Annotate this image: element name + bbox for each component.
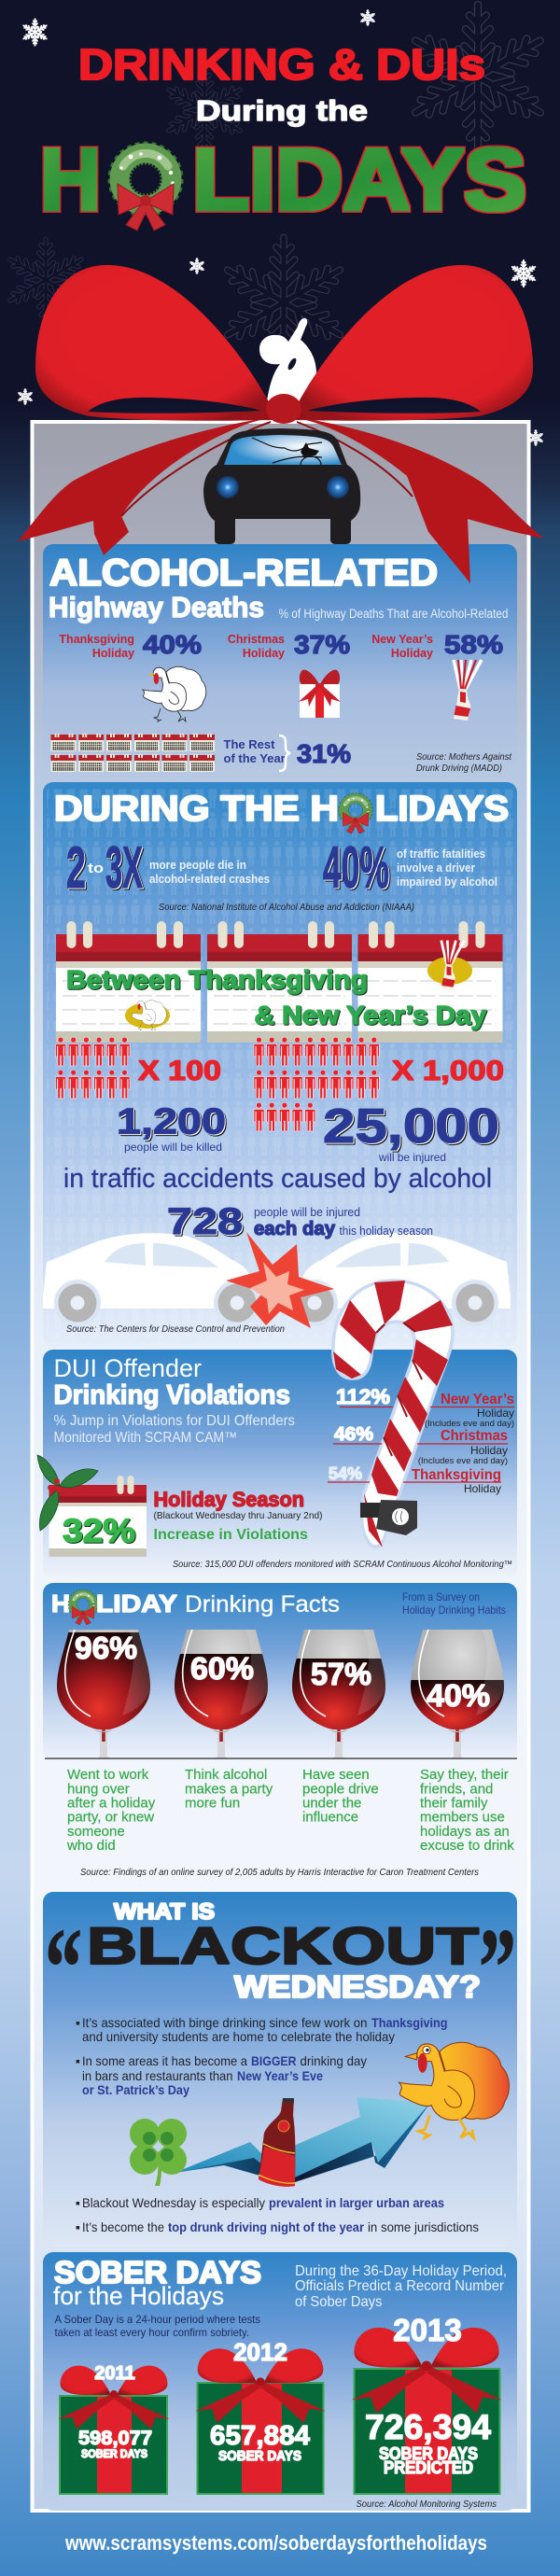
caption: say they: Say they, their xyxy=(420,1767,509,1783)
gift: 2013 xyxy=(351,2313,502,2494)
heading: for the holidays: for the Holidays xyxy=(53,2282,224,2310)
definition: sober day: A Sober Day is a 24-hour period where tests xyxy=(54,2313,260,2326)
caption: say they: members use xyxy=(420,1810,505,1826)
icon: beer bottle xyxy=(259,2098,295,2187)
label: thanksgiving holiday: Holiday xyxy=(92,647,134,660)
caption: say they: holidays as an xyxy=(420,1824,510,1840)
bullet: bigger drinking day: in bars and restaurants than xyxy=(82,2068,233,2083)
stat: thanksgiving 54 percent xyxy=(328,1464,501,1495)
title xyxy=(40,40,526,231)
caption: went to work: who did xyxy=(66,1838,116,1854)
stat: christmas 46 percent: Christmas xyxy=(441,1428,508,1444)
bow tail: right xyxy=(297,417,544,583)
car: left xyxy=(43,1233,254,1309)
bow loop: left xyxy=(35,265,273,421)
wine glass: 60 percent xyxy=(175,1630,268,1758)
heading: between thanksgiving: Between Thanksgiving xyxy=(66,965,368,994)
headlights xyxy=(217,476,349,498)
heading: blackout: BLACKOUT xyxy=(87,1916,479,1975)
crash explosion xyxy=(226,1232,334,1328)
source: MADD: Source: Mothers Against xyxy=(416,752,512,763)
heading: holiday season: Holiday Season xyxy=(153,1488,304,1511)
label: new year's holiday: New Year’s xyxy=(371,633,433,646)
stat: 728: 728 xyxy=(167,1201,243,1242)
subtitle: jump in violations: % Jump in Violations for DUI Offenders xyxy=(54,1413,295,1429)
panel: DUI offender drinking violations xyxy=(37,1350,517,1578)
bullet: bigger drinking day: In some areas it has become a xyxy=(82,2053,247,2068)
label: christmas holiday: Christmas xyxy=(228,633,285,646)
multiplier: x 100: X 100 xyxy=(138,1056,221,1086)
calendars xyxy=(56,921,502,1043)
bullet: top drunk driving: ▪ xyxy=(76,2219,80,2234)
source: MADD: Drunk Driving (MADD) xyxy=(416,763,502,774)
text: blackout wednesday thru january 2nd: (Blackout Wednesday thru January 2nd) xyxy=(153,1510,323,1521)
bullet: urban areas: ▪ xyxy=(76,2195,80,2210)
note: from a survey: Holiday Drinking Habits xyxy=(402,1603,506,1617)
stat: 25,000: 25,000 xyxy=(323,1099,499,1154)
caption: have seen: Have seen xyxy=(302,1767,370,1783)
stat: 58 percent: 58% xyxy=(444,630,503,659)
gift: 2012: 2012 xyxy=(233,2338,287,2366)
stat: 2 to 3x xyxy=(66,835,143,901)
heading: new year's day: & New Year’s Day xyxy=(254,1001,486,1029)
gift: 2011: 598,077 xyxy=(78,2428,152,2449)
rising arrow xyxy=(175,2097,430,2184)
bow knot xyxy=(266,394,301,424)
bullet: binge drinking: It’s associated with binge drinking since few work on xyxy=(82,2015,368,2030)
stat: thanksgiving 54 percent: Thanksgiving xyxy=(412,1467,501,1483)
note: from a survey: From a Survey on xyxy=(402,1590,480,1603)
panel: holiday drinking facts xyxy=(43,1583,517,1878)
text: people will be killed: people will be killed xyxy=(124,1141,222,1154)
windshield xyxy=(224,435,342,465)
brace xyxy=(279,735,290,771)
text: of traffic fatalities: impaired by alcohol xyxy=(397,875,497,889)
caption: think alcohol: makes a party xyxy=(185,1781,273,1797)
drinking figure silhouette xyxy=(259,318,316,407)
text: during the 36-day period: During the 36-Day Holiday Period, xyxy=(295,2263,507,2279)
title word: H: H xyxy=(40,131,101,228)
caption: went to work: hung over xyxy=(67,1781,130,1797)
caption: say they: their family xyxy=(420,1796,488,1812)
bullet: binge drinking: Thanksgiving xyxy=(371,2015,448,2030)
background snowflakes, dark outline xyxy=(7,5,547,368)
source: alcohol monitoring systems: Source: Alcohol Monitoring Systems xyxy=(357,2499,497,2510)
source: SCRAM: Source: 315,000 DUI offenders monitored with SCRAM Continuous Alcohol Monitoring™ xyxy=(173,1560,512,1570)
gift: 2013: 726,394 xyxy=(365,2408,491,2446)
stat: 40 percent of fatalities: 40% xyxy=(323,835,389,901)
caption: say they: friends, and xyxy=(420,1781,493,1797)
heading: what is: WHAT IS xyxy=(114,1899,215,1925)
stat: new year's 112 percent: 112% xyxy=(336,1385,390,1408)
bullet: bigger drinking day: or St. Patrick’s Day xyxy=(82,2082,189,2097)
heading: sober days: SOBER DAYS xyxy=(54,2255,261,2289)
stat: thanksgiving 54 percent: 54% xyxy=(329,1464,362,1483)
car: right xyxy=(300,1233,511,1309)
multiplier: x 1,000: X 1,000 xyxy=(392,1056,504,1086)
stat: christmas 46 percent: Holiday xyxy=(470,1444,508,1457)
text: increase in violations: Increase in Violations xyxy=(153,1527,308,1543)
caption: went to work: party, or knew xyxy=(67,1810,154,1826)
label: thanksgiving holiday: Thanksgiving xyxy=(59,633,134,646)
panel: what is blackout wednesday xyxy=(43,1892,517,2247)
panel: alcohol-related highway deaths xyxy=(43,544,517,777)
icon: orange turkey xyxy=(399,2042,509,2137)
stat: 32 percent: 32% xyxy=(63,1513,135,1549)
heading: alcohol-related: ALCOHOL-RELATED xyxy=(49,553,438,594)
calendars: rest of year xyxy=(50,734,215,772)
icon: four-leaf clover xyxy=(130,2119,187,2186)
label: the rest of the year: The Rest xyxy=(224,737,275,751)
gift: 2012 xyxy=(195,2338,326,2494)
stat: new year's 112 percent xyxy=(336,1385,514,1429)
icon: white turkey xyxy=(143,666,206,721)
heading: drinking facts: Drinking Facts xyxy=(185,1591,340,1617)
text: more people die: more people die in xyxy=(149,859,246,872)
label: the rest of the year: of the Year xyxy=(224,751,286,765)
icon: champagne bottle xyxy=(454,660,482,721)
people icons: killed xyxy=(56,1037,130,1099)
bullet: bigger drinking day: BIGGER xyxy=(251,2053,297,2068)
white frame xyxy=(32,422,528,2511)
caption: went to work: after a holiday xyxy=(67,1796,156,1812)
stat: 2 to 3x: 3X xyxy=(105,835,143,901)
stat: 1,200: 1,200 xyxy=(117,1101,226,1142)
monitoring bracelet xyxy=(360,1500,417,1535)
caption: have seen: people drive xyxy=(302,1781,379,1797)
caption: think alcohol: more fun xyxy=(185,1796,240,1812)
subheading: highway deaths: Highway Deaths xyxy=(49,591,264,623)
panel: during the holidays xyxy=(43,782,517,1347)
wine glass: 96 percent xyxy=(57,1630,150,1758)
caption: think alcohol: Think alcohol xyxy=(185,1767,267,1783)
wine glass: 57 percent: 57% xyxy=(311,1657,371,1691)
caption: say they: excuse to drink xyxy=(420,1838,514,1854)
icon: wreath xyxy=(343,798,369,833)
text: each day: each day xyxy=(254,1219,336,1239)
source: NIAAA: Source: National Institute of Alcohol Abuse and Addiction (NIAAA) xyxy=(159,902,414,913)
stat: new year's 112 percent: (Includes eve and day) xyxy=(425,1419,514,1429)
bullet: binge drinking: and university students are home to celebrate the holiday xyxy=(82,2029,395,2044)
crash cars xyxy=(43,1233,511,1326)
gift: 2012: SOBER DAYS xyxy=(218,2449,301,2464)
definition: sober day: taken at least every hour confirm sobriety. xyxy=(54,2326,249,2339)
heading: during the H: DURING THE H xyxy=(54,790,339,829)
gift: 2013: PREDICTED xyxy=(384,2458,473,2477)
wine glass: 96 percent: 96% xyxy=(75,1631,137,1665)
footer url: www.scramsystems.com/soberdaysfortheholidays xyxy=(64,2531,487,2555)
text: of traffic fatalities: of traffic fatalities xyxy=(397,847,485,861)
stat: 37 percent: 37% xyxy=(294,630,350,659)
stat: christmas 46 percent: 46% xyxy=(334,1424,373,1445)
bullet: top drunk driving: It’s become the xyxy=(82,2219,164,2234)
caption: have seen: under the xyxy=(302,1796,361,1812)
stat: 40 percent: 40% xyxy=(143,630,202,659)
bullet: binge drinking: ▪ xyxy=(76,2015,80,2030)
caption: have seen: influence xyxy=(302,1810,358,1826)
people pattern xyxy=(47,789,513,1339)
bow loop: right xyxy=(295,265,533,421)
red bow xyxy=(18,265,544,583)
stat: christmas 46 percent xyxy=(333,1424,508,1466)
text: more people die: alcohol-related crashes xyxy=(149,873,270,886)
gift: 2011 xyxy=(58,2363,170,2494)
text: in traffic accidents: in traffic accidents caused by alcohol xyxy=(63,1164,492,1194)
heading: DUI offender: DUI Offender xyxy=(54,1354,202,1382)
stat: new year's 112 percent: Holiday xyxy=(477,1407,514,1420)
heading: drinking violations: Drinking Violations xyxy=(54,1380,290,1410)
wine glass: 40 percent: 40% xyxy=(427,1678,490,1713)
bullet: urban areas: Blackout Wednesday is especially xyxy=(82,2195,265,2210)
icon: wreath xyxy=(72,1593,94,1625)
stat: 2 to 3x: to xyxy=(88,861,104,876)
text: of traffic fatalities: involve a driver xyxy=(397,861,475,875)
subtitle: jump in violations: Monitored With SCRAM CAM™ xyxy=(54,1430,237,1446)
label: new year's holiday: Holiday xyxy=(391,647,433,660)
candy cane xyxy=(333,1281,453,1547)
stat: new year's 112 percent: New Year’s xyxy=(441,1392,514,1407)
gift: 2013: 2013 xyxy=(393,2313,462,2347)
stat: thanksgiving 54 percent: Holiday xyxy=(464,1482,501,1495)
gift: 2013: SOBER DAYS xyxy=(379,2444,478,2463)
people icons: injured xyxy=(254,1037,379,1131)
heading: H: H xyxy=(51,1589,70,1617)
gift: 2011: SOBER DAYS xyxy=(81,2449,147,2460)
text: will be injured: will be injured xyxy=(378,1151,446,1164)
icon: bottle on gold xyxy=(427,941,472,990)
text: during the 36-day period: of Sober Days xyxy=(295,2294,383,2310)
bullet: bigger drinking day: ▪ xyxy=(76,2053,80,2068)
violation stats xyxy=(328,1385,514,1495)
title word: LIDAYS: LIDAYS xyxy=(192,131,526,228)
bullet: top drunk driving: in some jurisdictions xyxy=(368,2219,479,2234)
heading: liday: LIDAY xyxy=(96,1589,177,1617)
car body xyxy=(203,428,360,544)
wine glass: 40 percent xyxy=(411,1630,504,1758)
source: Harris: Source: Findings of an online survey of 2,005 adults by Harris Interactive for Caron Treatment Centers xyxy=(80,1868,479,1878)
gift: 2012: 657,884 xyxy=(210,2421,310,2451)
stat: christmas 46 percent: (Includes eve and day) xyxy=(418,1456,508,1466)
car with cracked windshield xyxy=(203,428,360,544)
caption: went to work: someone xyxy=(67,1824,125,1840)
white snowflakes xyxy=(18,10,543,445)
title line: During the: During the xyxy=(196,94,368,127)
text: this holiday season: this holiday season xyxy=(340,1225,433,1238)
panel: sober days xyxy=(43,2252,517,2511)
title line: Drinking & DUIs: DRINKING & DUIs xyxy=(78,40,485,89)
heading: blackout xyxy=(45,1905,516,2029)
text: during the 36-day period: Officials Predict a Record Number xyxy=(295,2278,505,2294)
icon: gift box xyxy=(299,670,341,718)
icon: wreath as O xyxy=(118,152,175,231)
label: christmas holiday: Holiday xyxy=(243,647,285,660)
wine glass: 57 percent xyxy=(292,1630,385,1758)
bullet: top drunk driving: top drunk driving night of the year xyxy=(168,2219,365,2234)
heading: lidays: LIDAYS xyxy=(375,790,509,829)
heading: wednesday: WEDNESDAY? xyxy=(234,1969,481,2004)
bow tail: left xyxy=(18,417,271,555)
wheels xyxy=(54,1280,498,1326)
bullet: urban areas: prevalent in larger urban areas xyxy=(269,2195,444,2210)
gift: 2011: 2011 xyxy=(94,2363,135,2384)
stat: 2 to 3x: 2 xyxy=(66,835,86,901)
text: people will be injured: people will be injured xyxy=(254,1206,360,1219)
icon: turkey on gold xyxy=(125,1001,170,1030)
heading: blackout: ” xyxy=(479,1905,516,2029)
caption: went to work: Went to work xyxy=(67,1767,149,1783)
bullet: bigger drinking day: drinking day xyxy=(301,2053,367,2068)
bullet: bigger drinking day: New Year’s Eve xyxy=(237,2068,323,2083)
heading: blackout: “ xyxy=(45,1905,82,2029)
icon: holly xyxy=(37,1455,98,1531)
stat: 31 percent: 31% xyxy=(297,739,351,768)
source: CDC: Source: The Centers for Disease Control and Prevention xyxy=(66,1324,285,1335)
wine glass: 60 percent: 60% xyxy=(190,1651,254,1686)
subtitle: % of Highway Deaths That are Alcohol-Related xyxy=(278,607,508,621)
calendar with holly xyxy=(37,1455,147,1557)
